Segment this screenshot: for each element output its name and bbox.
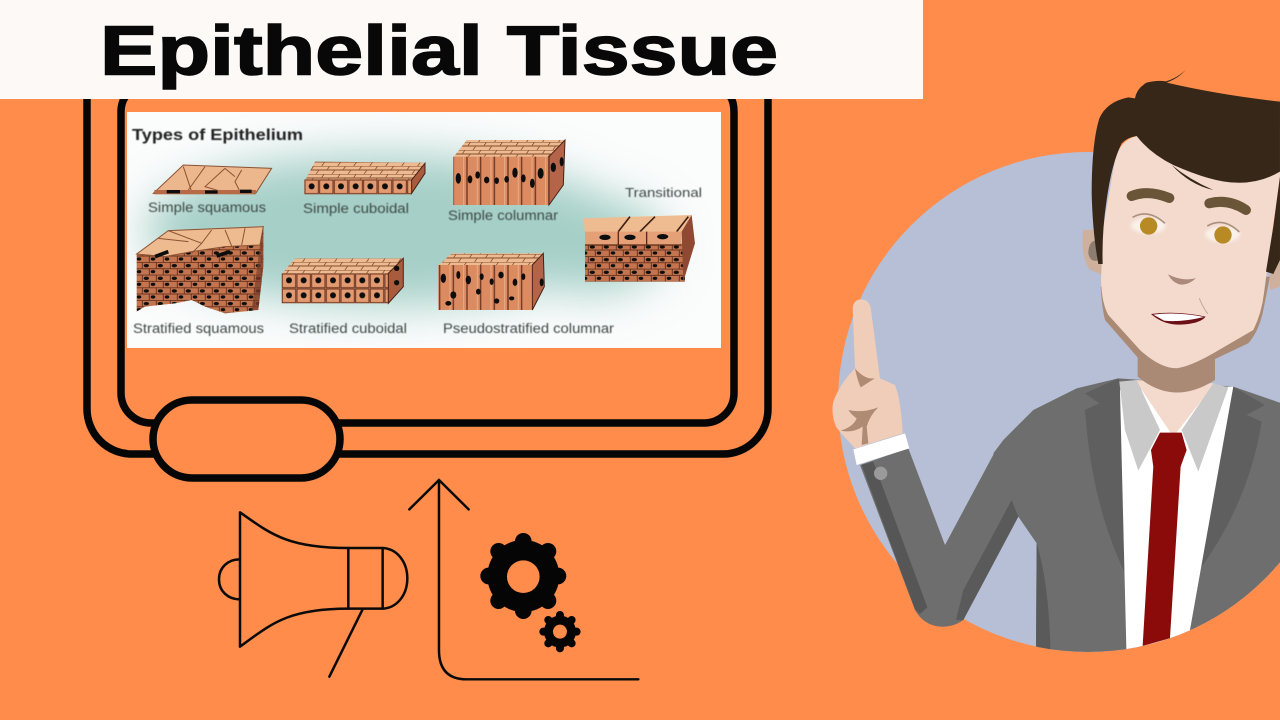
- inner frame: [121, 96, 734, 423]
- label: stratified cuboidal: Stratified cuboidal: [289, 321, 407, 336]
- label: simple cuboidal: Simple cuboidal: [303, 201, 409, 216]
- neck skin: [1135, 380, 1215, 437]
- neck: [1138, 347, 1215, 393]
- shirt: [1120, 387, 1233, 660]
- cheek line: [1199, 298, 1208, 314]
- image background: [127, 112, 721, 348]
- illustration: simple columnar: [453, 140, 565, 205]
- mouth: [1151, 313, 1206, 325]
- pill button: [153, 400, 340, 478]
- icon: large gear: [487, 540, 559, 612]
- tie: [1143, 433, 1187, 646]
- device frame outline: [87, 90, 768, 478]
- label: transitional: Transitional: [625, 185, 702, 200]
- icon: megaphone: [219, 512, 407, 677]
- inner sleeve shadow: [956, 500, 1018, 620]
- label: simple squamous: Simple squamous: [148, 200, 266, 215]
- illustration: simple cuboidal: [304, 162, 425, 194]
- head: [1082, 70, 1280, 393]
- illustration: simple squamous: [153, 165, 272, 194]
- finger creases: [841, 368, 878, 445]
- left eye: [1131, 218, 1166, 234]
- diagram heading: Types of Epithelium: [132, 127, 303, 144]
- left lapel: [1085, 378, 1124, 572]
- illustration: transitional: [583, 215, 695, 282]
- jacket side shadow: [1036, 544, 1050, 650]
- raised arm: [832, 299, 1018, 627]
- green backdrop: [145, 154, 665, 306]
- nose: [1168, 274, 1196, 285]
- right collar: [1182, 383, 1228, 472]
- left eyebrow: [1132, 193, 1169, 198]
- character: presenter: [832, 70, 1280, 660]
- sleeve shadow: [862, 462, 927, 614]
- outer frame: [87, 90, 768, 454]
- icon: small gear: [543, 615, 577, 648]
- jacket body: [993, 378, 1280, 660]
- hand: [832, 299, 903, 448]
- hair main: [1092, 70, 1280, 264]
- sleeve: [860, 448, 1018, 627]
- banner background: [0, 0, 923, 99]
- label: stratified squamous: Stratified squamous: [133, 321, 264, 336]
- sleeve button: [874, 467, 887, 480]
- right ear: [1270, 257, 1280, 290]
- hair right side: [1266, 177, 1280, 274]
- left collar: [1119, 380, 1160, 471]
- hair strand: [1172, 165, 1213, 190]
- illustration: pseudostratified columnar: [438, 253, 544, 310]
- torso: [993, 378, 1280, 660]
- shirt cuff: [853, 433, 909, 465]
- icon: growth arrow axes: [409, 480, 638, 679]
- illustration: stratified squamous: [137, 227, 263, 313]
- face: [1101, 127, 1280, 368]
- label: simple columnar: Simple columnar: [448, 208, 559, 223]
- presenter backdrop circle: [838, 152, 1280, 652]
- title banner: [0, 0, 923, 99]
- illustration: stratified cuboidal: [282, 258, 403, 303]
- left ear: [1082, 230, 1103, 275]
- title: Epithelial Tissue: [100, 12, 778, 90]
- right lapel: [1202, 386, 1264, 566]
- right eye: [1205, 226, 1240, 242]
- label: pseudostratified columnar: Pseudostratified columnar: [443, 321, 615, 336]
- right eyebrow: [1209, 202, 1246, 210]
- panel: types of epithelium diagram: [127, 112, 721, 348]
- jaw shadow: [1101, 277, 1270, 375]
